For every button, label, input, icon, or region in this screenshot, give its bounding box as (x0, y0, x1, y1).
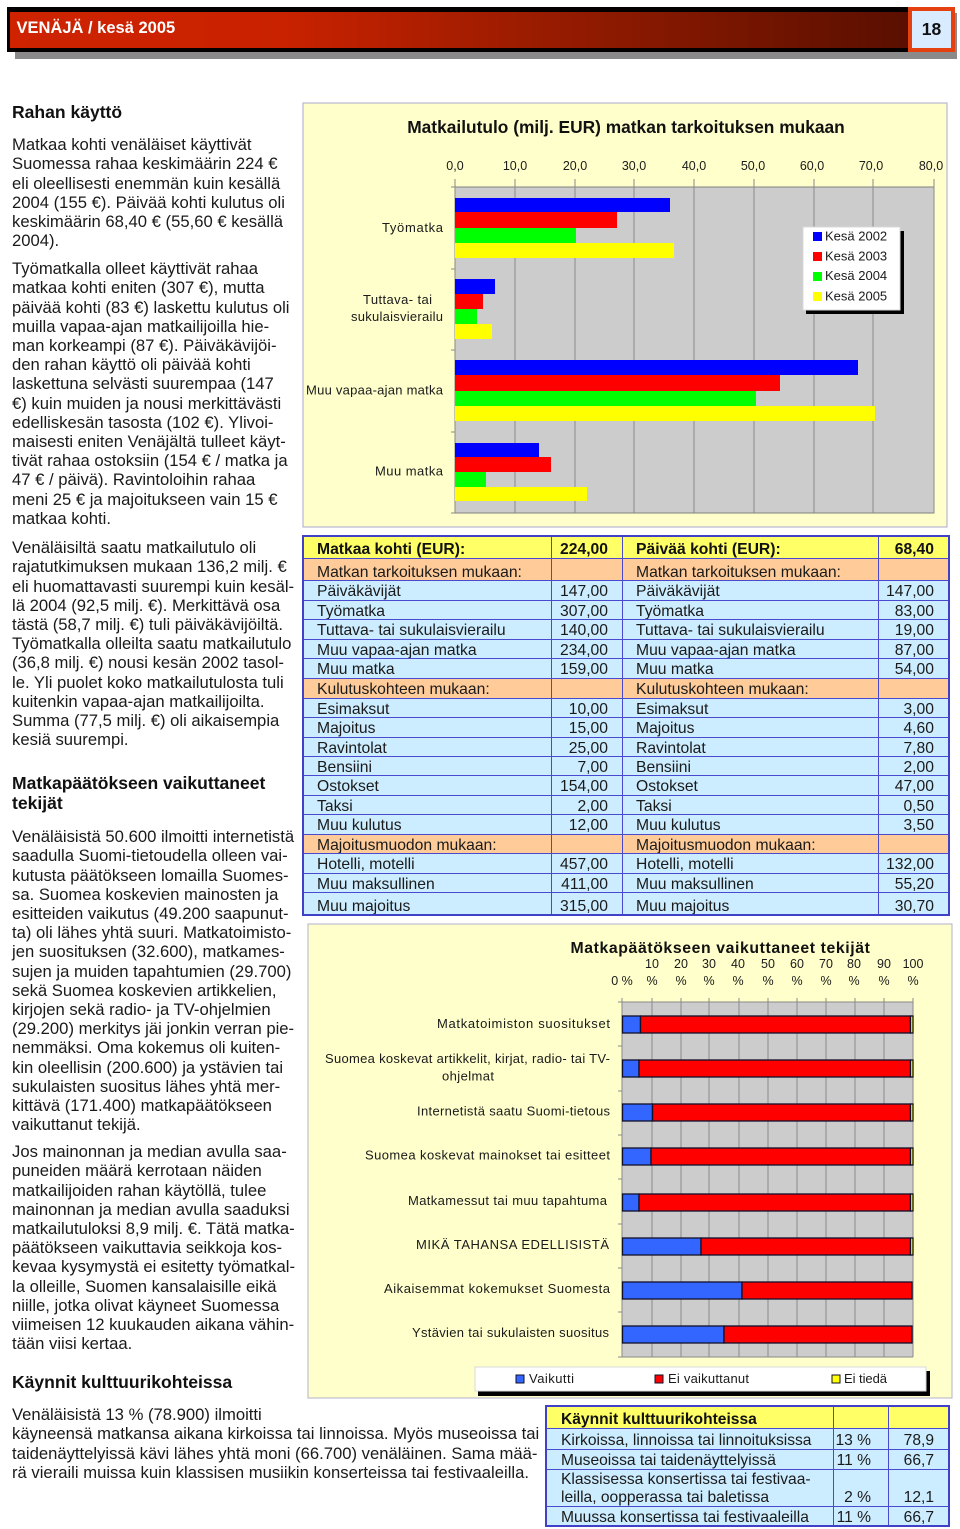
text: decision factors: kin oleellisin (200.600) ja ystävien tai (12, 1058, 283, 1077)
totals row: Taksi (317, 798, 353, 814)
panel: decision factors chart (308, 924, 952, 1398)
totals row: 147,00 (560, 583, 608, 600)
section: by purpose: Matkan tarkoituksen mukaan: (636, 564, 841, 580)
x axis labels: % (703, 974, 715, 988)
x axis labels: 0,0 (446, 159, 464, 173)
bars: Muu vapaa-ajan matka (455, 360, 875, 421)
category labels: Ystävien tai sukulaisten suositus (412, 1325, 610, 1340)
totals row: Muu vapaa-ajan matka (636, 642, 796, 658)
legend (803, 227, 904, 314)
chart title: Matkailutulo (milj. EUR) matkan tarkoituksen mukaan (407, 117, 845, 137)
text: spending details: edelliskesän tasosta (102 €). Ylivoi- (12, 413, 273, 432)
legend (475, 1367, 930, 1396)
x axis labels: 60,0 (800, 159, 824, 173)
category labels: Internetistä saatu Suomi-tietous (417, 1104, 610, 1118)
text: decision factors: (29.200) merkitys jäi jonkin verran pie- (12, 1019, 294, 1038)
bar: Matkamessut (622, 1194, 913, 1211)
heading: Rahan käyttö: Rahan käyttö (12, 102, 122, 122)
totals row: 3,50 (903, 817, 934, 834)
totals row: Taksi (636, 798, 672, 814)
text: advertising: tään viisi kertaa. (12, 1334, 132, 1353)
text: decision factors: sa. Suomea koskevien mainosten ja (12, 885, 278, 904)
text: decision factors: sukulaisten suositus lähes yhtä mer- (12, 1077, 280, 1096)
legend: Ei vaikuttanut (668, 1371, 749, 1386)
totals row: 47,00 (895, 778, 934, 795)
totals row: 234,00 (560, 642, 608, 658)
totals row: Muu majoitus (636, 898, 729, 914)
section: by accommodation: Majoitusmuodon mukaan: (636, 836, 816, 853)
x axis labels: 100 (903, 957, 923, 971)
bar: Internetistä saatu Suomi-tietous (622, 1104, 913, 1121)
x axis labels: 60 (790, 957, 804, 971)
text: spending details: muilla vapaa-ajan matkailijoilla hie- (12, 317, 269, 336)
totals row (304, 537, 948, 914)
table header: leilla, oopperassa tai baletissa (561, 1488, 769, 1506)
totals row: 55,20 (895, 876, 934, 892)
panel: tourism income chart (302, 102, 948, 528)
text: spending details (12, 259, 290, 528)
totals row: 147,00 (886, 583, 934, 600)
section: by purpose (304, 558, 948, 580)
table header (547, 1407, 948, 1525)
section: by spending target: Kulutuskohteen mukaan: (636, 681, 809, 698)
text: tourism income: eli huomattavasti suurempi kuin kesäl- (12, 576, 294, 596)
text: tourism income: Summa (77,5 milj. €) oli aikaisempia (12, 711, 279, 730)
totals row: 224,00 (560, 541, 608, 558)
category labels (306, 220, 444, 478)
table: cultural visits (545, 1405, 950, 1527)
x axis labels: % (820, 974, 832, 988)
text: cultural visits: käyneensä matkansa aikana kirkoissa tai linnoissa. Myös museoissa tai (12, 1424, 539, 1443)
table header: 11 % (837, 1452, 871, 1469)
text: spending details: tivät rahaa ostoksiin (154 € / matka ja (12, 451, 288, 470)
totals row: Päiväkävijät (636, 583, 720, 600)
text: advertising: matkailijoiden rahan käytöllä, tulee (12, 1180, 266, 1200)
totals row: 19,00 (895, 622, 934, 639)
totals row: Työmatka (317, 602, 385, 619)
bar: Matkatoimiston suositukset (622, 1016, 913, 1033)
section: by accommodation (304, 834, 948, 853)
text: decision factors: nemmäksi. Oma kokemus oli kuiten- (12, 1038, 280, 1057)
x axis labels: 30,0 (622, 159, 646, 173)
page number box (908, 7, 955, 52)
text: tourism income: tästä (58,7 milj. €) tuli päiväkävijöiltä. (12, 615, 283, 634)
x axis labels (611, 957, 923, 988)
heading: Matkapäätökseen vaikuttaneet tekijät (12, 772, 266, 812)
text: decision factors: kirjojen sekä radio- ja TV-ohjelmien (12, 1000, 271, 1019)
text: spending details: man korkeampi (87 €). Päiväkävijöi- (12, 336, 277, 355)
text: decision factors: Venäläisistä 50.600 ilmoitti internetistä (12, 827, 294, 846)
totals row: Työmatka (636, 602, 704, 619)
totals row: 159,00 (560, 661, 608, 678)
totals row: 83,00 (895, 602, 934, 619)
banner bar (7, 7, 909, 52)
text: advertising: niille, jotka olivat käyneet Suomessa (12, 1296, 279, 1315)
totals row: Ravintolat (636, 740, 706, 756)
x axis labels: 50,0 (741, 159, 765, 173)
totals row: 140,00 (560, 622, 608, 639)
section: by spending target: Kulutuskohteen mukaan: (317, 681, 490, 698)
text: cultural visits: rä vieraili muissa kuin klassisen musiikin konserteissa tai festivaaleilla. (12, 1463, 529, 1482)
totals row: Päiväkävijät (317, 583, 401, 600)
table header: Käynnit kulttuurikohteissa (561, 1411, 757, 1428)
legend: Kesä 2004 (825, 268, 887, 283)
totals row: Muu vapaa-ajan matka (317, 642, 477, 658)
text: tourism income: Työmatkalla olleilta saatu matkailutulo (12, 634, 291, 653)
text: spending intro: eli oleellisesti enemmän kuin kesällä (12, 174, 280, 192)
section: by accommodation: Majoitusmuodon mukaan: (317, 836, 497, 853)
totals row: Muu matka (636, 661, 714, 678)
totals row: 12,00 (569, 817, 608, 834)
text: spending details: laskettuna selvästi suurempaa (147 (12, 374, 274, 393)
totals row: Majoitus (636, 720, 694, 737)
text: tourism income: rajatutkimuksen mukaan 136,2 milj. € (12, 557, 287, 576)
totals row: Muu matka (317, 661, 395, 678)
totals row: 25,00 (569, 740, 608, 756)
x axis labels: 30 (702, 957, 716, 971)
x axis labels: 20,0 (563, 159, 587, 173)
totals row: 54,00 (895, 661, 934, 678)
x axis labels: % (675, 974, 687, 988)
totals row: Hotelli, motelli (636, 856, 734, 873)
bar: Aikaisemmat kokemukset Suomesta (622, 1282, 912, 1299)
category labels: ohjelmat (442, 1068, 494, 1084)
chart background (303, 103, 947, 527)
text: tourism income: le. Yli puolet koko matkailutulosta tuli (12, 673, 284, 692)
text: spending intro (12, 135, 285, 250)
text: cultural visits: Venäläisistä 13 % (78.900) ilmoitti (12, 1405, 262, 1424)
text: spending details: matkaa kohti eniten (307 €), mutta (12, 278, 265, 297)
table header: Klassisessa konsertissa tai festivaa- (561, 1471, 811, 1488)
category labels: Aikaisemmat kokemukset Suomesta (384, 1281, 611, 1296)
totals row: Muu kulutus (317, 817, 402, 834)
x axis labels: % (878, 974, 890, 988)
category labels: Työmatka (382, 220, 444, 235)
table header: 13 % (835, 1432, 871, 1449)
category labels: Matkamessut tai muu tapahtuma (408, 1193, 608, 1208)
heading: Matkapäätökseen vaikuttaneet tekijät: Matkapäätökseen vaikuttaneet (12, 772, 265, 792)
x axis labels: 40 (731, 957, 745, 971)
text: tourism income: kesiä suurempi. (12, 730, 129, 749)
text: spending details: päivää kohti (83 €) laskettu kulutus oli (12, 298, 290, 316)
totals row: 307,00 (560, 602, 608, 619)
totals row: Muu maksullinen (636, 876, 754, 892)
x axis labels: % (848, 974, 860, 988)
x axis labels (446, 159, 943, 173)
bars: Tuttava- tai sukulaisvierailu (455, 279, 495, 339)
bars: Työmatka (455, 198, 674, 258)
text: advertising: mainonnan ja median avulla saaduksi (12, 1200, 290, 1219)
text: tourism income: lä 2004 (92,5 milj. €). Merkittävä osa (12, 596, 280, 615)
legend: Vaikutti (529, 1371, 574, 1386)
header banner (7, 7, 957, 59)
category labels: Matkatoimiston suositukset (437, 1016, 610, 1031)
bar: Suomea koskevat mainokset (622, 1148, 913, 1165)
text: decision factors: saadulla Suomi-tietoudella olleen vai- (12, 846, 288, 865)
section: by purpose: Matkan tarkoituksen mukaan: (317, 564, 522, 580)
table: spending per trip and per day (302, 535, 950, 916)
totals row: 4,60 (903, 720, 934, 737)
totals row: 2,00 (577, 798, 608, 814)
text: decision factors: jen suosituksen (32.600), matkames- (12, 942, 285, 961)
table header: 78,9 (904, 1432, 934, 1449)
category labels: sukulaisvierailu (351, 309, 443, 324)
totals row: Bensiini (636, 758, 691, 775)
totals row: Esimaksut (636, 700, 708, 717)
text: spending intro: 2004). (12, 231, 59, 250)
text: spending intro: Matkaa kohti venäläiset käyttivät (12, 135, 252, 154)
text: decision factors: kittävä (171.400) matkapäätökseen (12, 1096, 272, 1115)
totals row: 411,00 (561, 876, 608, 892)
bars: Muu matka (455, 443, 587, 501)
text: decision factors: sekä Suomea koskevien artikkelien, (12, 981, 277, 1000)
text: advertising: puneiden määrä kerrotaan näiden (12, 1161, 262, 1180)
totals row: 457,00 (560, 856, 608, 873)
x axis labels: 50 (761, 957, 775, 971)
totals row: 315,00 (560, 898, 608, 914)
totals row: 68,40 (895, 541, 934, 558)
x axis labels: 40,0 (682, 159, 706, 173)
totals row: Majoitus (317, 720, 375, 737)
x axis labels: 90 (877, 957, 891, 971)
text: spending intro: 2004 (155 €). Päivää kohti kulutus oli (12, 193, 285, 212)
text: spending intro: keskimäärin 68,40 € (55,60 € kesällä (12, 212, 283, 231)
category labels: Muu vapaa-ajan matka (306, 382, 444, 398)
totals row: 3,00 (903, 700, 934, 717)
totals row: Muu majoitus (317, 898, 410, 914)
totals row: Bensiini (317, 758, 372, 775)
x axis labels: % (646, 974, 658, 988)
totals row: Ostokset (636, 778, 698, 795)
plot area (455, 187, 934, 513)
text: decision factors: esitteiden vaikutus (49.200 saapunut- (12, 904, 289, 923)
totals row: Ostokset (317, 778, 379, 795)
table header: Kirkoissa, linnoissa tai linnoituksissa (561, 1432, 811, 1449)
plot area (622, 1002, 913, 1357)
heading: Matkapäätökseen vaikuttaneet tekijät: tekijät (12, 792, 63, 812)
x axis labels: 0 % (611, 974, 633, 988)
totals row: 15,00 (569, 720, 608, 737)
text: advertising: päätökseen vaikuttavia seikkoja kos- (12, 1238, 282, 1257)
x axis labels: 10,0 (503, 159, 527, 173)
legend: Kesä 2003 (825, 248, 887, 264)
text: advertising: viimeisen 12 kuukauden aikana vähin- (12, 1315, 294, 1334)
legend: Ei tiedä (844, 1371, 888, 1386)
totals row: Esimaksut (317, 700, 389, 717)
legend: Kesä 2002 (825, 228, 887, 244)
totals row: Hotelli, motelli (317, 856, 415, 873)
heading: Käynnit kulttuurikohteissa: Käynnit kulttuurikohteissa (12, 1372, 232, 1392)
totals row: 10,00 (569, 700, 608, 717)
text: spending details: maisesti eniten Venäjältä tulleet käyt- (12, 432, 286, 451)
table header: 12,1 (904, 1489, 934, 1506)
chart background (308, 924, 952, 1398)
totals row: Tuttava- tai sukulaisvierailu (636, 622, 825, 639)
totals row: Tuttava- tai sukulaisvierailu (317, 622, 506, 639)
category labels: Muu matka (375, 464, 444, 478)
legend: Kesä 2005 (825, 288, 887, 304)
table header: 2 % (844, 1489, 871, 1506)
text: tourism income (12, 538, 294, 749)
x axis labels: 80 (847, 957, 861, 971)
table header: Museoissa tai taidenäyttelyissä (561, 1452, 776, 1469)
category labels: Suomea koskevat mainokset tai esitteet (365, 1148, 610, 1162)
text: spending details: matkaa kohti. (12, 509, 111, 528)
totals row: 0,50 (903, 798, 934, 814)
page number box: 18 (922, 19, 941, 39)
bar: Suomea koskevat artikkelit (622, 1060, 913, 1077)
totals row: 87,00 (895, 642, 934, 658)
text: cultural visits (12, 1405, 539, 1482)
text: advertising: kevaa kysymystä ei esitetty työmatkal- (12, 1257, 295, 1276)
totals row: 7,80 (903, 740, 934, 756)
x axis labels: 70,0 (859, 159, 883, 173)
category labels (325, 1016, 611, 1340)
text: spending details: 47 € / päivä). Ravintoloihin rahaa (12, 470, 255, 489)
bar: Mikä tahansa edellisistä (622, 1238, 913, 1255)
x axis labels: 20 (674, 957, 688, 971)
x axis labels: % (732, 974, 744, 988)
text: spending details: den rahan käyttö oli päivää kohti (12, 355, 251, 374)
category labels: MIKÄ TAHANSA EDELLISISTÄ (416, 1237, 609, 1252)
text: tourism income: Venäläisiltä saatu matkailutulo oli (12, 538, 256, 557)
text: decision factors: ta) oli lähes yhtä suuri. Matkatoimisto- (12, 923, 291, 942)
text: spending intro: Suomessa rahaa keskimäärin 224 € (12, 154, 277, 173)
totals row: Ravintolat (317, 740, 387, 756)
text: decision factors (12, 827, 294, 1134)
table header: 66,7 (904, 1452, 934, 1469)
x axis labels: 70 (819, 957, 833, 971)
banner title: VENÄJÄ / kesä 2005 (16, 18, 175, 36)
x axis labels: % (762, 974, 774, 988)
x axis labels: 10 (645, 957, 659, 971)
banner gradient (10, 12, 909, 48)
section: by spending target (304, 678, 948, 698)
x axis labels: % (791, 974, 803, 988)
totals row: Päivää kohti (EUR): (636, 541, 781, 558)
totals row: 154,00 (560, 778, 608, 795)
totals row: 132,00 (886, 856, 934, 873)
text: advertising (12, 1142, 295, 1353)
text: tourism income: (36,8 milj. €) nousi kesän 2002 tasol- (12, 653, 284, 672)
text: advertising: matkailutuloksi 8,9 milj. €. Tätä matka- (12, 1219, 295, 1238)
text: decision factors: sujen ja muiden tapahtumien (29.700) (12, 962, 291, 981)
totals row: Matkaa kohti (EUR): (317, 541, 465, 558)
text: advertising: la olleille, Suomen kansalaisille eikä (12, 1277, 277, 1296)
totals row: 30,70 (895, 898, 934, 914)
chart title: Matkapäätökseen vaikuttaneet tekijät (571, 940, 871, 957)
text: tourism income: kuitenkin vapaa-ajan matkailijoilta. (12, 692, 265, 711)
text: spending details: €) kuin muiden ja nousi merkittävästi (12, 394, 281, 413)
text: cultural visits: taidenäyttelyissä kävi lähes yhtä moni (66.700) venäläinen. Sama mää- (12, 1444, 537, 1462)
totals row: Muu maksullinen (317, 876, 435, 892)
bar: Ystävien tai sukulaisten suositus (622, 1326, 912, 1343)
x axis labels: 80,0 (919, 159, 943, 173)
category labels: Suomea koskevat artikkelit, kirjat, radio- tai TV- (325, 1051, 610, 1066)
banner shadow (15, 13, 957, 59)
x axis labels: % (907, 974, 919, 988)
text: spending details: meni 25 € ja majoitukseen vain 15 € (12, 490, 278, 509)
text: decision factors: kutusta päätökseen lomailla Suomes- (12, 866, 289, 884)
totals row: 2,00 (903, 758, 934, 775)
totals row: 7,00 (577, 758, 608, 775)
text: advertising: Jos mainonnan ja median avulla saa- (12, 1142, 287, 1161)
text: decision factors: vaikuttanut tekijä. (12, 1115, 141, 1134)
category labels: Tuttava- tai (363, 292, 432, 307)
text: spending details: Työmatkalla olleet käyttivät rahaa (12, 259, 258, 278)
totals row: Muu kulutus (636, 817, 721, 834)
